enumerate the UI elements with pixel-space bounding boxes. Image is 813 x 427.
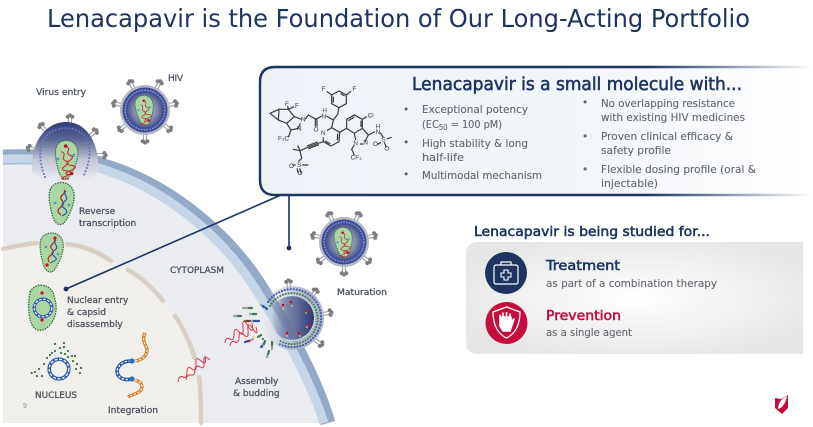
right bullet list: [582, 97, 756, 190]
stage: virus entry: Virus entry: [36, 88, 87, 98]
cell membrane: [3, 157, 328, 423]
left bullet list: (EC: [422, 119, 440, 131]
stage: nuclear entry and capsid disassembly: & capsid: [67, 308, 106, 318]
stage: nucleus with DNA: [23, 343, 81, 410]
left bullet list: Multimodal mechanism: [422, 170, 542, 182]
prevention text: Prevention: [546, 308, 621, 324]
prevention text: as a single agent: [546, 327, 632, 339]
viral RNA crossing nucleus: [178, 356, 210, 382]
callout panel: small molecule attributes: [260, 67, 813, 195]
capsid crossing nuclear pore: [40, 233, 63, 272]
treatment text: Treatment: [545, 258, 620, 274]
treatment text: [545, 258, 717, 290]
stage: HIV virion: HIV: [168, 74, 184, 84]
stage: nucleus with DNA: NUCLEUS: [35, 391, 77, 401]
molecule structure: N: [321, 130, 326, 137]
molecule structure: S: [381, 137, 386, 144]
molecule structure: O: [373, 141, 378, 148]
stage: nuclear entry and capsid disassembly: disassembly: [67, 320, 123, 330]
stage: virus entry: [25, 88, 108, 180]
molecule structure: O: [314, 126, 319, 133]
right bullet list: •: [582, 131, 588, 143]
molecule structure: N: [363, 140, 368, 147]
stage: maturation: [309, 209, 387, 298]
right bullet list: •: [582, 164, 588, 176]
panel: viral lifecycle cell diagram: [3, 74, 387, 423]
molecule structure: F: [322, 86, 326, 93]
stage: HIV virion: [110, 74, 184, 145]
left bullet list: High stability & long: [422, 138, 528, 150]
molecule structure: O: [289, 163, 294, 170]
callout heading: Lenacapavir is a small molecule with...: [412, 75, 742, 95]
molecule structure: O: [298, 170, 303, 177]
left bullet list: half-life: [422, 152, 464, 164]
molecule structure: N: [376, 129, 381, 136]
right bullet list: No overlapping resistance: [601, 98, 735, 110]
left bullet list: [403, 104, 542, 182]
panel: treatment and prevention: [466, 242, 803, 354]
molecule structure: S: [297, 162, 301, 169]
molecule structure: F: [352, 86, 356, 93]
treatment text: as part of a combination therapy: [546, 278, 717, 290]
stage: nucleus with DNA: 9: [23, 403, 27, 410]
molecule structure: H: [322, 108, 327, 115]
icon: medical briefcase: [485, 252, 527, 294]
right bullet list: Flexible dosing profile (oral &: [601, 164, 756, 176]
cell cytoplasm: [3, 157, 328, 423]
icon: shield with hand: [486, 302, 528, 344]
stage: assembly and budding: [225, 278, 334, 399]
stage: reverse transcription: [49, 182, 136, 229]
right bullet list: safety profile: [601, 145, 671, 157]
molecule structure: N: [353, 140, 358, 147]
nuclear membrane segments: [3, 243, 201, 423]
connector: callout to nuclear entry: [64, 195, 281, 291]
molecule structure: [270, 86, 392, 177]
stage: reverse transcription: Reverse: [79, 207, 116, 217]
stage: integration: [108, 333, 158, 416]
right bullet list: •: [582, 97, 588, 109]
stage: assembly and budding: & budding: [233, 389, 280, 399]
prevention text: [546, 308, 632, 339]
right bullet list: Proven clinical efficacy &: [601, 131, 733, 143]
stage: integration: Integration: [108, 406, 158, 416]
right bullet list: injectable): [601, 178, 658, 190]
logo: red shield: [775, 395, 788, 414]
molecule structure: N: [301, 117, 306, 124]
molecule structure: N: [297, 125, 302, 132]
molecule structure: CF₃: [351, 154, 362, 161]
molecule structure: N: [322, 113, 327, 120]
left bullet list: = 100 pM): [448, 119, 502, 131]
stage: reverse transcription: transcription: [79, 219, 136, 229]
left bullet list: •: [403, 104, 409, 116]
title: Lenacapavir is the Foundation of Our Long-Acting Portfolio: [47, 4, 750, 33]
molecule structure: O: [384, 146, 389, 153]
left bullet list: •: [403, 137, 409, 149]
left bullet list: 50: [439, 123, 448, 132]
heading: being studied for: Lenacapavir is being studied for...: [474, 224, 710, 240]
molecule structure: F: [295, 102, 299, 109]
left bullet list: •: [403, 169, 409, 181]
molecule structure: F₃C: [278, 136, 289, 143]
stage: nuclear entry and capsid disassembly: Nuclear entry: [67, 296, 129, 306]
molecule structure: H: [376, 124, 381, 131]
left bullet list: Exceptional potency: [422, 104, 528, 116]
molecule structure: F: [285, 101, 289, 108]
molecule structure: Cl: [368, 112, 374, 119]
stage: maturation: Maturation: [337, 288, 387, 298]
stage: nuclear entry and capsid disassembly: [29, 285, 129, 330]
right bullet list: with existing HIV medicines: [601, 112, 745, 124]
connector: callout to maturation: [287, 195, 291, 250]
stage: assembly and budding: Assembly: [235, 377, 279, 387]
cytoplasm label: CYTOPLASM: [170, 266, 224, 276]
nucleus: [3, 245, 201, 423]
